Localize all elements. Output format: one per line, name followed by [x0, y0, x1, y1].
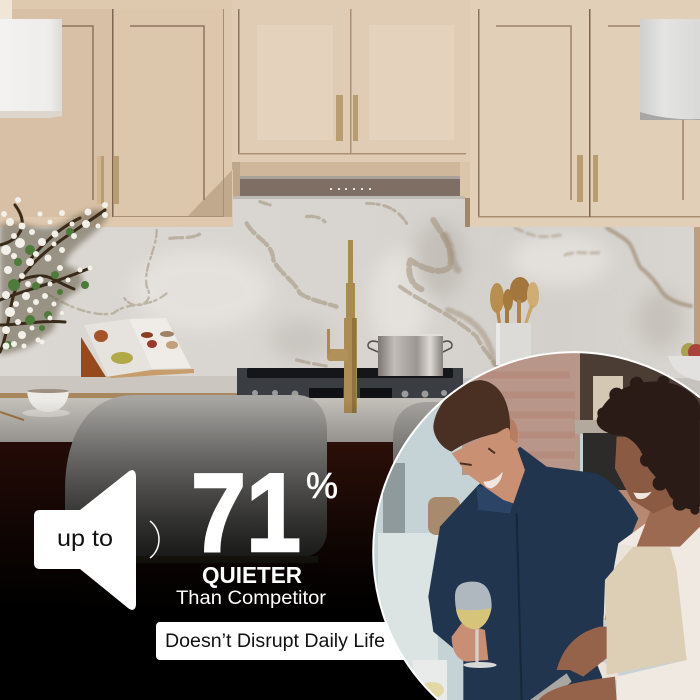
statistic 71 percent: 71: [191, 451, 301, 575]
apron: [605, 547, 687, 675]
heading: quieter: QUIETER: [202, 562, 302, 588]
dark gradient overlay: [0, 400, 700, 625]
man: [428, 380, 638, 700]
photo white ring: [373, 352, 700, 700]
marble backsplash: [0, 160, 700, 380]
woman's hands and knife: [557, 627, 607, 677]
pill text: Doesn’t Disrupt Daily Life: [165, 630, 385, 652]
percent sign: %: [306, 465, 338, 506]
inset photo: couple cooking: [370, 350, 700, 700]
gold faucet: [327, 240, 357, 413]
right cabinet: [465, 0, 700, 227]
range hood: [233, 162, 470, 199]
speaker icon: [34, 470, 136, 610]
subheading: than competitor: Than Competitor: [176, 588, 327, 609]
upper cabinets: [0, 0, 700, 227]
left pendant lamp: [0, 0, 62, 118]
face: [615, 436, 674, 514]
photo background: [370, 350, 700, 700]
up to label: up to: [57, 525, 113, 551]
cooking pot: [368, 334, 452, 376]
back counter: [0, 227, 700, 398]
hair: [433, 380, 510, 452]
hood control lights: [330, 188, 371, 190]
face: [452, 423, 525, 503]
wine glass: [455, 582, 497, 668]
woman: [530, 376, 700, 700]
neck and chest: [637, 497, 700, 547]
blouse: [617, 517, 700, 700]
cabinet handles: [97, 95, 598, 204]
right pendant lamp: [640, 19, 700, 120]
fruit bowl: [668, 343, 700, 381]
left cabinet: [0, 0, 240, 227]
benefit pill: [156, 622, 412, 660]
island counter and base: [0, 398, 700, 700]
shirt: [428, 447, 638, 700]
cookbook on stand: [81, 318, 194, 378]
sound wave arc: [150, 521, 159, 558]
teacup and saucer: [0, 389, 70, 420]
bar stools: [65, 395, 450, 563]
potted blossom branch: [0, 197, 108, 355]
gas range: [237, 368, 463, 400]
man's hand: [452, 623, 488, 662]
middle cabinet: [232, 0, 470, 162]
utensil crock: [490, 277, 539, 365]
hair: [597, 376, 700, 515]
